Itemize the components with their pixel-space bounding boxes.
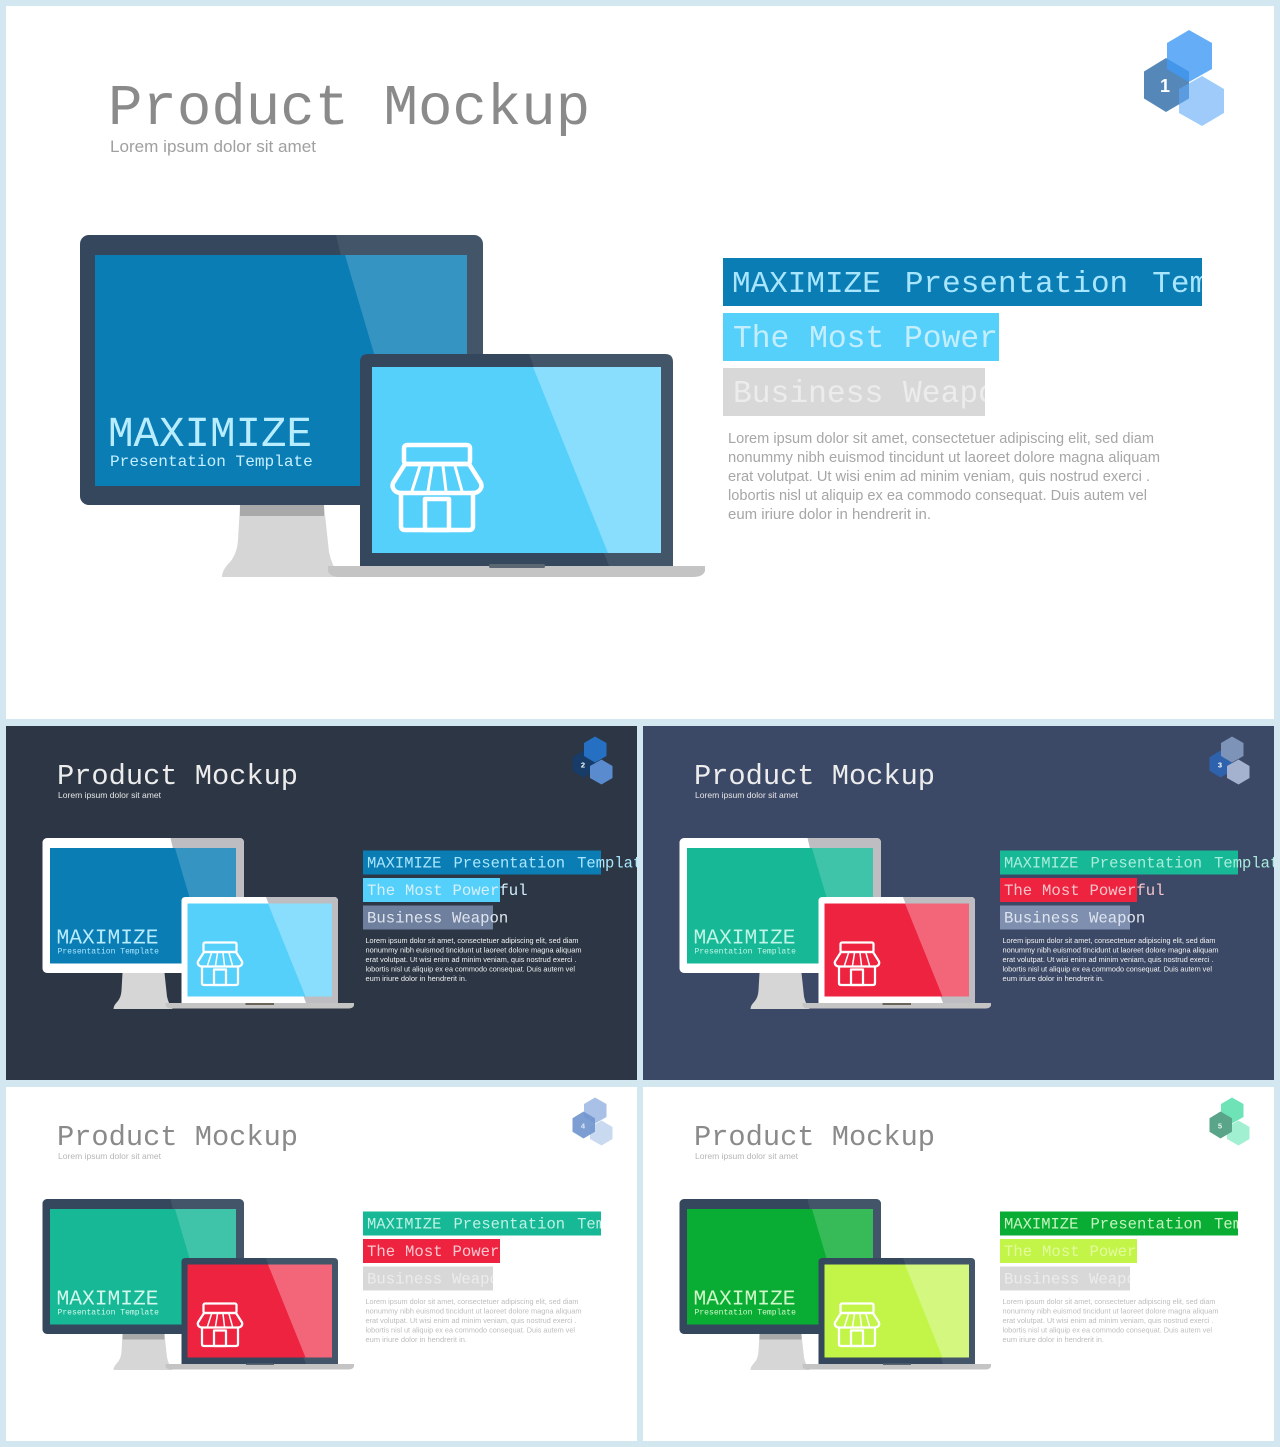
monitor: [680, 838, 881, 1009]
text block: highlighted headings: The Most Powerful: [367, 1243, 528, 1261]
text block: highlighted headings: [363, 1212, 601, 1290]
monitor: [42, 838, 244, 1009]
body paragraph: [728, 430, 1160, 523]
body paragraph: Lorem ipsum dolor sit amet, consectetuer adipiscing elit, sed diam: [366, 936, 578, 945]
monitor: Presentation Template: [110, 453, 313, 471]
monitor: MAXIMIZE: [108, 411, 312, 459]
body paragraph: erat volutpat. Ut wisi enim ad minim veniam, quis nostrud exerci .: [1002, 1316, 1214, 1325]
text block: highlighted headings: Business Weapon: [367, 910, 508, 928]
laptop: [166, 1258, 354, 1370]
panel: slide 3 slate: [643, 726, 1274, 1080]
icon: store: [198, 1304, 242, 1346]
icon: store: [835, 942, 879, 985]
body paragraph: lobortis nisl ut aliquip ex ea commodo consequat. Duis autem vel: [728, 487, 1147, 504]
title: Product Mockup: [57, 1121, 298, 1154]
monitor: MAXIMIZE: [694, 1288, 796, 1312]
body paragraph: nonummy nibh euismod tincidunt ut laoreet dolore magna aliquam: [366, 946, 582, 954]
title: Product Mockup: [694, 760, 935, 793]
monitor: MAXIMIZE: [56, 926, 159, 950]
panel: slide 4 white teal and red: [6, 1087, 637, 1441]
body paragraph: lobortis nisl ut aliquip ex ea commodo consequat. Duis autem vel: [366, 964, 575, 974]
icon: store: [198, 942, 242, 985]
laptop: [802, 1258, 991, 1370]
monitor: Presentation Template: [694, 948, 796, 956]
subtitle: Lorem ipsum dolor sit amet: [695, 790, 799, 800]
body paragraph: Lorem ipsum dolor sit amet, consectetuer adipiscing elit, sed diam: [728, 430, 1154, 447]
icon: hexagon badge 1: [1144, 30, 1224, 126]
body paragraph: [1002, 1297, 1218, 1344]
body paragraph: eum iriure dolor in hendrerit in.: [1002, 1335, 1104, 1344]
monitor: [80, 235, 483, 577]
laptop: [802, 897, 991, 1008]
body paragraph: eum iriure dolor in hendrerit in.: [366, 974, 467, 983]
icon: hexagon badge 5: [1210, 1098, 1250, 1146]
text block: highlighted headings: The Most Powerful: [733, 322, 1054, 357]
body paragraph: nonummy nibh euismod tincidunt ut laoreet dolore magna aliquam: [1002, 1306, 1218, 1316]
body paragraph: nonummy nibh euismod tincidunt ut laoreet dolore magna aliquam: [728, 449, 1160, 466]
text block: highlighted headings: Business Weapon: [733, 377, 1016, 412]
body paragraph: erat volutpat. Ut wisi enim ad minim veniam, quis nostrud exerci .: [366, 955, 576, 964]
monitor: Presentation Template: [694, 1308, 796, 1318]
icon: hexagon badge 4: 4: [581, 1122, 586, 1130]
body paragraph: Lorem ipsum dolor sit amet, consectetuer adipiscing elit, sed diam: [366, 1297, 578, 1306]
icon: hexagon badge 5: 5: [1218, 1122, 1222, 1130]
monitor: Presentation Template: [58, 1308, 159, 1318]
text block: highlighted headings: The Most Powerful: [1004, 1243, 1165, 1261]
title: Product Mockup: [694, 1121, 935, 1154]
body paragraph: eum iriure dolor in hendrerit in.: [728, 506, 931, 523]
icon: store: [393, 445, 481, 530]
panel: slide 1 large blue: [6, 6, 1274, 719]
subtitle: Lorem ipsum dolor sit amet: [58, 1151, 162, 1161]
text block: highlighted headings: The Most Powerful: [1004, 882, 1165, 900]
icon: hexagon badge 3: [1210, 736, 1250, 784]
text block: highlighted headings: [363, 850, 652, 930]
body paragraph: Lorem ipsum dolor sit amet, consectetuer adipiscing elit, sed diam: [1002, 936, 1216, 945]
text block: highlighted headings: The Most Powerful: [367, 882, 528, 900]
icon: hexagon badge 3: 3: [1218, 760, 1222, 770]
monitor: Presentation Template: [58, 948, 159, 956]
body paragraph: lobortis nisl ut aliquip ex ea commodo consequat. Duis autem vel: [1002, 1326, 1212, 1334]
icon: hexagon badge 2: 2: [581, 760, 585, 770]
text block: highlighted headings: [1000, 1212, 1238, 1290]
body paragraph: lobortis nisl ut aliquip ex ea commodo consequat. Duis autem vel: [366, 1326, 575, 1334]
body paragraph: eum iriure dolor in hendrerit in.: [1002, 974, 1104, 983]
icon: hexagon badge 1: 1: [1160, 76, 1170, 96]
icon: hexagon badge 2: [572, 736, 612, 784]
body paragraph: erat volutpat. Ut wisi enim ad minim veniam, quis nostrud exerci .: [1002, 955, 1214, 964]
panel: slide 2 dark blue: [6, 726, 637, 1080]
monitor: MAXIMIZE: [694, 926, 796, 950]
laptop: [166, 897, 354, 1008]
body paragraph: nonummy nibh euismod tincidunt ut laoreet dolore magna aliquam: [1002, 946, 1218, 954]
subtitle: Lorem ipsum dolor sit amet: [110, 137, 316, 156]
monitor: MAXIMIZE: [56, 1288, 159, 1312]
icon: store: [835, 1304, 879, 1346]
title: Product Mockup: [108, 77, 590, 142]
body paragraph: Lorem ipsum dolor sit amet, consectetuer adipiscing elit, sed diam: [1002, 1297, 1216, 1306]
body paragraph: [1002, 936, 1218, 983]
body paragraph: erat volutpat. Ut wisi enim ad minim veniam, quis nostrud exerci .: [366, 1316, 576, 1325]
body paragraph: nonummy nibh euismod tincidunt ut laoreet dolore magna aliquam: [366, 1306, 582, 1316]
laptop: [328, 354, 705, 577]
title: Product Mockup: [57, 760, 298, 793]
body paragraph: erat volutpat. Ut wisi enim ad minim veniam, quis nostrud exerci .: [728, 468, 1150, 485]
text block: highlighted headings: Business Weapon: [1004, 910, 1145, 928]
text block: highlighted headings: Business Weapon: [1004, 1270, 1145, 1288]
icon: hexagon badge 4: [572, 1098, 612, 1146]
text block: highlighted headings: [723, 258, 1202, 416]
monitor: [680, 1199, 881, 1370]
body paragraph: [366, 1297, 582, 1344]
text block: highlighted headings: [1000, 850, 1280, 930]
body paragraph: lobortis nisl ut aliquip ex ea commodo consequat. Duis autem vel: [1002, 964, 1212, 974]
body paragraph: eum iriure dolor in hendrerit in.: [366, 1335, 467, 1344]
monitor: [42, 1199, 244, 1370]
subtitle: Lorem ipsum dolor sit amet: [695, 1151, 799, 1161]
panel: slide 5 white green and lime: [643, 1087, 1274, 1441]
text block: highlighted headings: Business Weapon: [367, 1270, 508, 1288]
subtitle: Lorem ipsum dolor sit amet: [58, 790, 162, 800]
body paragraph: [366, 936, 582, 983]
